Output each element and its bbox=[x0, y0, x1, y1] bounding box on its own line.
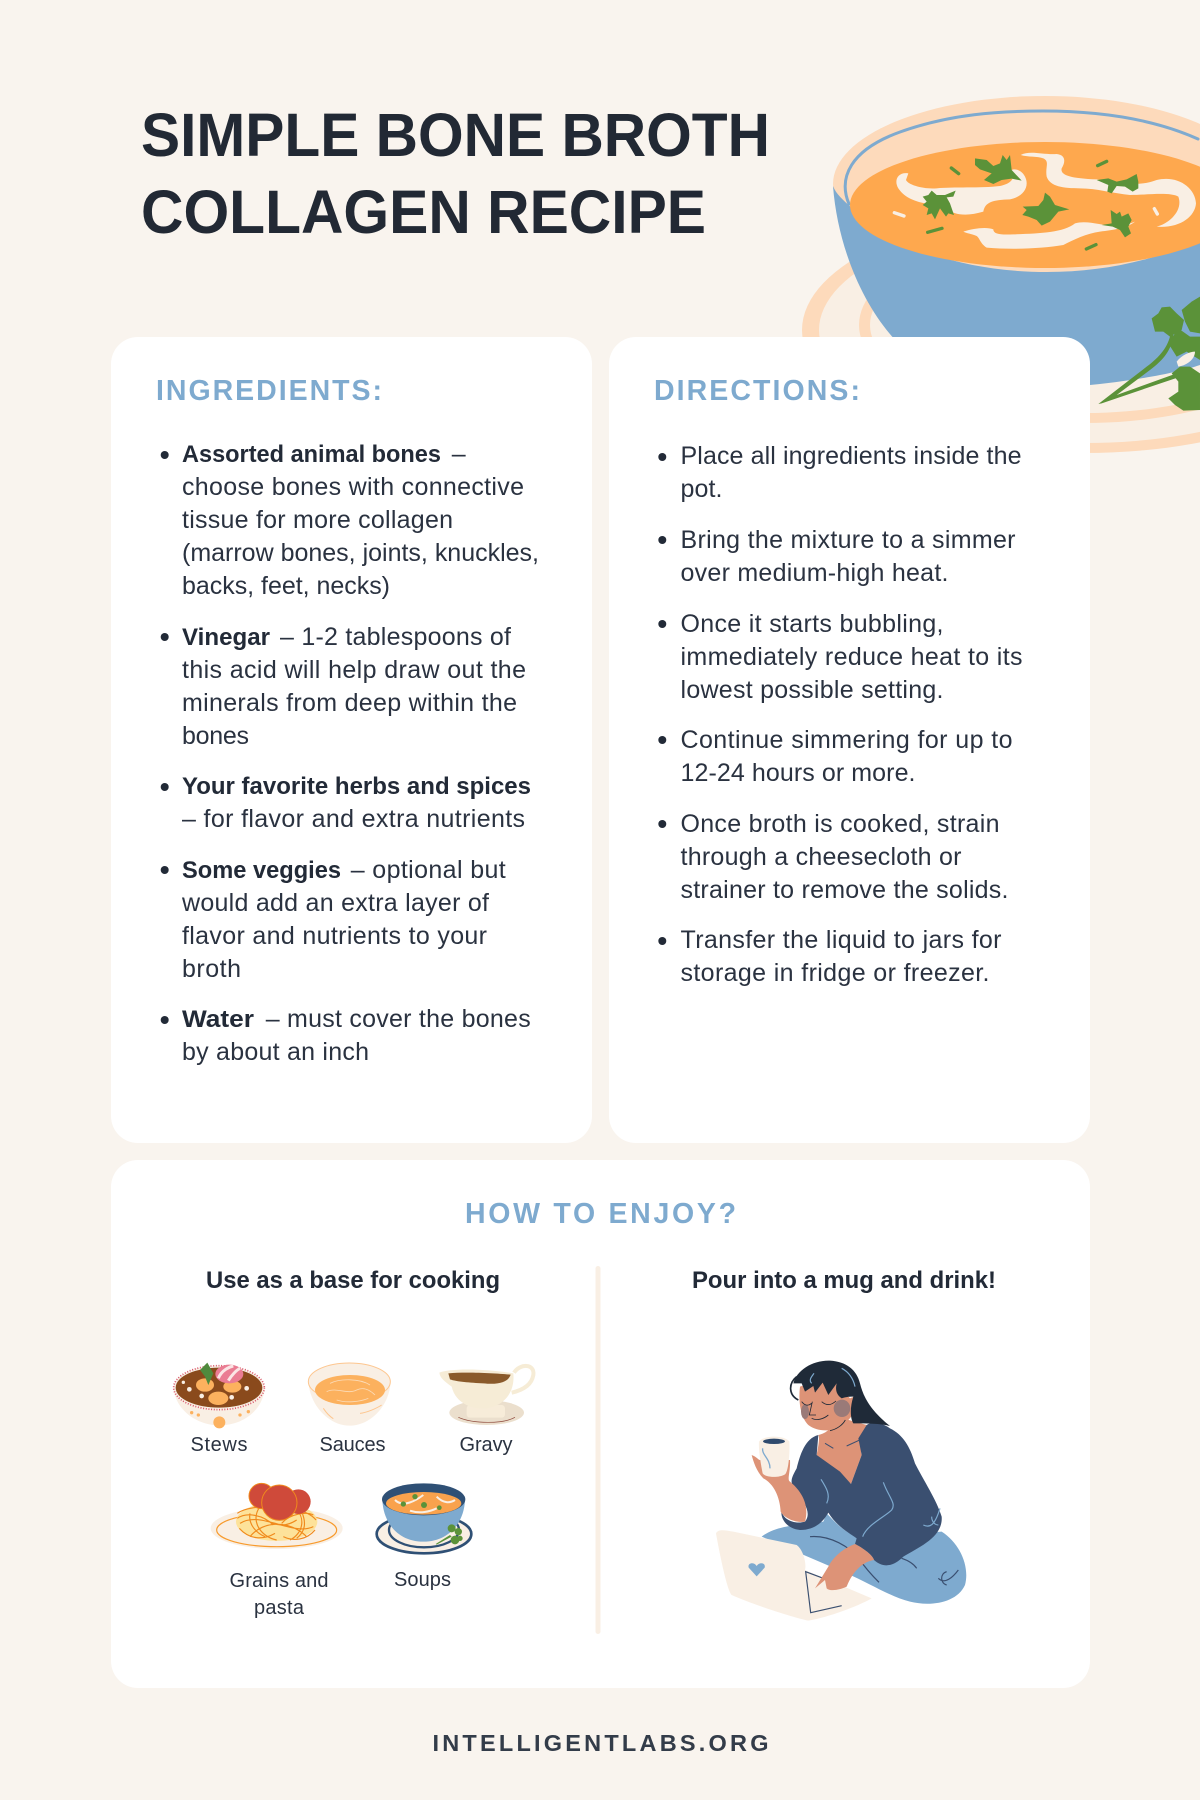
list: directions: through a cheesecloth or bbox=[680, 843, 962, 871]
subheading: base for cooking: Use as a base for cooking bbox=[206, 1267, 500, 1294]
list: directions: storage in fridge or freezer. bbox=[680, 959, 990, 987]
list: ingredients: – 1-2 tablespoons of bbox=[280, 623, 511, 651]
panel: directions bbox=[609, 337, 1090, 1143]
label: gravy: Gravy bbox=[460, 1434, 512, 1456]
list: directions: pot. bbox=[680, 475, 722, 503]
list: ingredients: Water bbox=[182, 1006, 254, 1033]
panel: ingredients bbox=[111, 337, 592, 1143]
list: ingredients: flavor and nutrients to your bbox=[182, 922, 487, 950]
label: grains and pasta bbox=[230, 1570, 328, 1619]
skin neck and chest bbox=[817, 1417, 867, 1484]
label: grains and pasta: pasta bbox=[254, 1597, 305, 1619]
list: ingredients: – optional but bbox=[351, 856, 506, 884]
icon: sauce bowl bbox=[308, 1363, 391, 1426]
list: ingredients: tissue for more collagen bbox=[182, 506, 453, 534]
title bbox=[141, 101, 770, 247]
list: ingredients: broth bbox=[182, 955, 241, 983]
hair bbox=[793, 1361, 890, 1426]
list: directions: Once broth is cooked, strain bbox=[680, 810, 1000, 838]
list: directions: Once it starts bubbling, bbox=[680, 610, 944, 638]
list: ingredients: would add an extra layer of bbox=[181, 889, 489, 917]
list: directions: lowest possible setting. bbox=[680, 676, 944, 704]
list: ingredients: Vinegar bbox=[182, 624, 270, 651]
list: directions: immediately reduce heat to its bbox=[680, 643, 1022, 671]
laptop bbox=[716, 1530, 872, 1621]
heading: directions: DIRECTIONS: bbox=[654, 375, 860, 407]
list: ingredients: by about an inch bbox=[182, 1038, 369, 1066]
list: directions bbox=[658, 442, 1022, 987]
icon: stew bowl bbox=[173, 1363, 265, 1428]
list: directions: over medium-high heat. bbox=[680, 559, 948, 587]
top bbox=[781, 1423, 942, 1565]
list: ingredients: Assorted animal bones bbox=[182, 441, 441, 468]
title: COLLAGEN RECIPE bbox=[141, 178, 706, 247]
panel: how to enjoy bbox=[111, 1160, 1090, 1688]
plate bbox=[802, 207, 1200, 453]
list: directions: strainer to remove the solids. bbox=[680, 876, 1008, 904]
rim line bbox=[845, 111, 1198, 204]
list: ingredients: – must cover the bones bbox=[266, 1005, 531, 1033]
list: directions: Place all ingredients inside the bbox=[680, 442, 1022, 470]
list: ingredients: minerals from deep within the bbox=[182, 689, 517, 717]
face bbox=[799, 1377, 860, 1430]
label: grains and pasta: Grains and bbox=[230, 1570, 328, 1592]
facial features bbox=[802, 1401, 845, 1431]
soup bbox=[850, 142, 1200, 268]
footer: website: INTELLIGENTLABS.ORG bbox=[432, 1730, 768, 1756]
bowl rim bbox=[833, 96, 1200, 272]
illustration: woman with mug and laptop bbox=[716, 1361, 966, 1621]
list: ingredients: (marrow bones, joints, knuckles, bbox=[182, 539, 539, 567]
heading: how to enjoy: HOW TO ENJOY? bbox=[465, 1198, 736, 1230]
list: ingredients bbox=[161, 440, 539, 1066]
illustration: soup bowl on plate bbox=[802, 96, 1200, 453]
list: directions: Transfer the liquid to jars for bbox=[680, 926, 1002, 954]
list: ingredients: this acid will help draw out the bbox=[182, 656, 526, 684]
list: ingredients: choose bones with connective bbox=[182, 473, 524, 501]
subheading: mug: Pour into a mug and drink! bbox=[692, 1267, 996, 1294]
cream swirls and herbs bbox=[894, 153, 1196, 249]
list: ingredients: – bbox=[452, 440, 466, 468]
list: directions: Bring the mixture to a simmer bbox=[680, 526, 1016, 554]
icon: pasta bbox=[211, 1483, 343, 1549]
icon: gravy boat bbox=[439, 1366, 533, 1425]
list: directions: Continue simmering for up to bbox=[680, 726, 1012, 754]
list: ingredients: Your favorite herbs and spices bbox=[182, 773, 531, 800]
jeans bbox=[762, 1513, 966, 1604]
hand bbox=[815, 1544, 874, 1590]
list: ingredients: backs, feet, necks) bbox=[182, 572, 390, 600]
list: ingredients: Some veggies bbox=[182, 857, 341, 884]
list: directions: 12-24 hours or more. bbox=[680, 759, 916, 787]
heading: ingredients: INGREDIENTS: bbox=[156, 375, 382, 407]
list: ingredients: bones bbox=[182, 722, 249, 750]
mug bbox=[759, 1437, 789, 1477]
icon: soup bowl small bbox=[377, 1483, 471, 1553]
label: sauces: Sauces bbox=[320, 1434, 386, 1456]
label: soups: Soups bbox=[394, 1569, 451, 1591]
bowl body bbox=[833, 186, 1200, 387]
parsley sprig bbox=[1098, 297, 1200, 411]
label: stews: Stews bbox=[190, 1434, 248, 1456]
title: SIMPLE BONE BROTH bbox=[141, 101, 770, 170]
list: ingredients: – for flavor and extra nutrients bbox=[182, 805, 525, 833]
arm bbox=[752, 1455, 806, 1522]
